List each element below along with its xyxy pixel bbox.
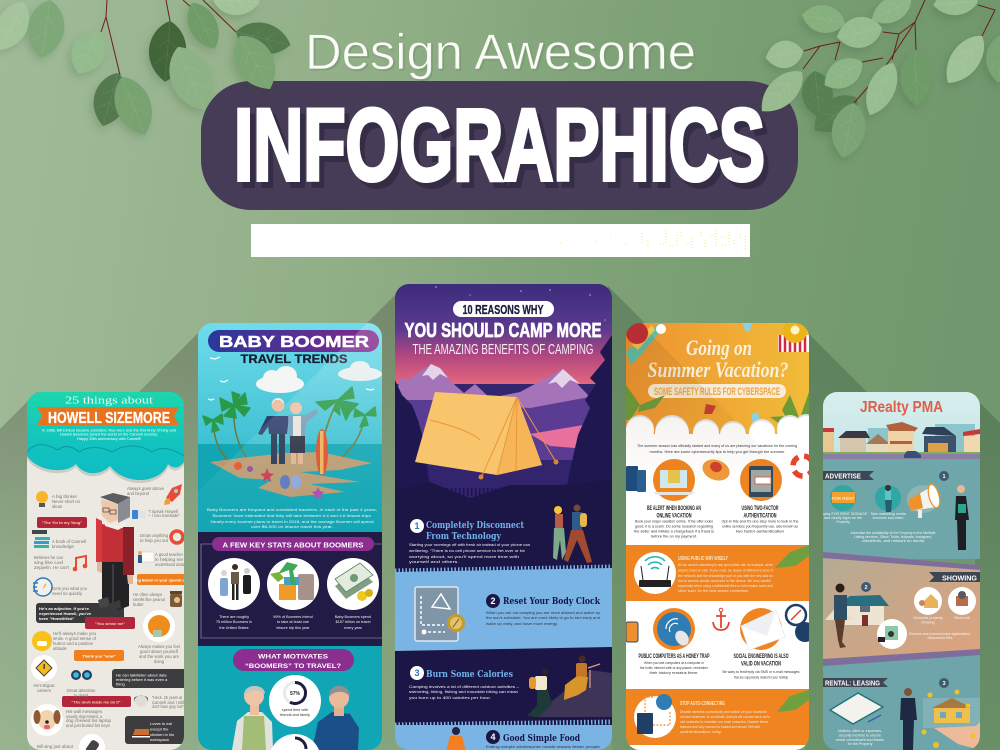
map icon [415,587,465,641]
callout pills: been "Howellified" [39,616,74,621]
title: Design Awesome: Design Awesome [306,26,698,82]
section 1: wellbeing. "There is no cell phone service to fret over or be [409,548,526,553]
hikers couple [553,504,592,563]
rule: public computers [638,608,710,675]
section 4: Eating simple wholesome meals means fewer people [486,744,600,749]
section 3: you burn up to 400 calories per hour. [409,695,491,700]
panel: wifi: Be too careful connecting to any open public wifi, for example, at the [678,562,774,567]
rule 1 [634,459,714,538]
donut 57 percent: spend time with [282,708,308,712]
callout pills: chicken in his [150,732,174,737]
stats heading pill [212,537,374,551]
rule: public computers: the hotel, internet café or any places, remember [640,665,709,670]
donut lower [269,734,321,750]
motivations heading pill: WHAT MOTIVATES [258,654,329,660]
panel: rental leasing: RENTAL: LEASING [825,680,880,688]
town skyline [823,422,980,454]
pill: you sense me: "You sense me" [95,621,125,626]
panel: rental leasing [823,649,981,750]
rule 1: BE ALERT WHEN BOOKING AN [647,506,701,512]
panel: advertise: FOR RENT [832,496,855,501]
tiny caption text: ideas [52,504,62,509]
section 4: Good Simple Food [503,734,581,744]
tiny caption text: Always goes above [127,486,165,491]
tent [415,392,558,480]
panel: rental leasing: rental commitment and leases [836,738,884,742]
tiny caption text: dog chewed his laptop [66,718,112,723]
tiny caption text: Never short on [52,499,81,504]
section 3 [395,647,612,728]
leaves: top left branch [0,0,294,141]
motivations heading pill: “BOOMERS” TO TRAVEL? [245,663,341,670]
heading pill: 10 REASONS WHY [462,302,544,317]
callout pills: experienced Howell, you've [39,611,92,616]
tiny caption text: Bill sing just about [37,744,74,749]
card header with clouds: Happy 25th anniversary with Cannell! [77,437,141,441]
callout pills: except the [150,726,169,732]
panel: advertise: Listing services, Zillow, Trulia, Hotpads, Instagram, [854,535,932,539]
stat captions: every year [344,626,363,630]
section 2: Reset Your Body Clock [503,597,601,607]
tiny caption text: usually dog-related, a [66,714,103,719]
stat captions: 75 million Boomers in [216,620,252,624]
panel: stop auto connecting [626,689,809,745]
tiny caption text: Zeppelin. He can't [34,565,70,570]
card title: JRealty PMA [860,399,943,416]
panel: showing: Show unit [954,616,970,620]
tiny caption text: "I speak Howell [148,509,178,514]
tiny caption text: doing [154,659,165,664]
sea [198,444,382,534]
tiny caption text: need so quickly [52,591,83,596]
panel: advertise: brochure and video [873,516,903,520]
intro paragraph [207,507,377,529]
older woman [232,686,273,750]
beach decorations [626,319,809,365]
woman cooking [446,727,466,750]
rule: social engineering: that are supposedly related to your holiday [734,674,788,680]
intro text [637,443,797,454]
panel: advertise: ADVERTISE [825,474,861,480]
card: Howell Sizemore [27,392,192,750]
section 3: swimming, hiking, fishing and mountain biking can mean [409,689,518,694]
panel: advertise: 1 [942,474,946,480]
section 3: 3 [414,668,420,678]
section 2: the sun's schedule. You are more likely to go to bed early and [486,615,600,620]
light overlay [198,323,382,496]
callout pills: He's an adjective. If you're [39,606,90,611]
tiny caption text: careers [37,688,51,693]
panel: stop auto connecting: cell networks to maintain our hotel networks. Disable these [680,719,769,724]
heading script [648,335,788,382]
section 1: From Technology [426,532,502,542]
section 1: Completely Disconnect [426,521,525,531]
tiny caption text: good about yourself [140,649,179,654]
tiny caption text: A good teacher [155,552,184,557]
heading script: Summer Vacation? [648,357,788,382]
mountains [395,364,612,500]
panel: stop auto connecting: STOP AUTO-CONNECTING [680,701,725,707]
stat captions: There are roughly [219,615,249,619]
section 1: 1 [414,521,420,531]
card: Baby Boomer Travel Trends [198,323,382,750]
safety rules pill [648,384,786,398]
title: Design Awesome: Design Awesome [305,24,696,80]
stat captions: to take at least one [277,620,309,624]
panel: advertise: Property [836,520,850,524]
callout pills: thing [116,682,125,686]
rule 1: good, it is a scam. Do some research regarding [635,524,713,528]
intro paragraph: 'Boomers' have estimated that they will take between 4.4 and 4.6 leisure trips. [212,513,372,518]
panel: showing [823,552,980,665]
passports, hat and lifebuoy [626,456,813,492]
callout pills: He can talk/listen about data [116,672,167,678]
rule: public computers: their history remains there. [650,670,698,675]
card: Going on Summer Vacation [626,312,817,750]
intro text: The summer season has officially started and many of us are planning our vacations for the coming [637,443,797,448]
tiny caption text: knowledge [52,544,75,549]
older man [312,686,359,750]
stat captions: the United States [219,626,249,630]
card: 10 Reasons Why You Should Camp More [395,284,612,750]
stat captions: $157 billion on travel [336,620,371,624]
rule 2: USING TWO-FACTOR [742,506,779,512]
panel: advertise [819,459,980,559]
panel: wifi: the network and the knowledge part of you with the rest and do [678,573,774,578]
panel: wifi: airport, hotel or café. If you must, be aware of different scams of [678,568,774,572]
sky clouds and birds [208,356,382,401]
tiny caption text: and the work you are [139,654,180,659]
surfboard [316,429,328,475]
section 1: Starting your mornings off with fresh air instead of your phone can [409,542,530,547]
tiny caption text: and beyond [127,491,150,496]
rule: social engineering: VALID ON VACATION [741,662,781,668]
tiny caption text: smells like peanut [133,597,166,602]
motivations heading pill [233,649,354,671]
rule 1: Book your major vacation online. If the offer looks [635,518,713,524]
intro text: months. Here are some cybersecurity tips to help you get through the summer [650,449,785,454]
panel: wifi: other such, for the best secure connection [678,588,748,593]
rule 1: ONLINE VACATION [656,514,692,520]
stat captions: Baby Boomers spend [335,615,371,619]
title banner: INFOGRAPHICS: INFOGRAPHICS [234,88,765,202]
donut 57 percent: friends and family [280,713,310,717]
anchor [713,608,729,630]
tiny caption text: to help you out [140,538,169,543]
tiny caption text: A big thinker [52,494,78,499]
stat captions: leisure trip this year [277,626,310,630]
rule: social engineering: Be wary to text/reply via SMS or e-mail messages [722,669,800,674]
tiny caption text: He often always [133,592,162,597]
pill: you sense me [85,617,135,629]
palm trees [203,387,376,462]
section 2 [395,567,612,652]
tiny caption text: attitude [53,646,67,651]
rule 1: the seller and initiate a chargeback if a fraud is [634,528,714,534]
rule 2: AUTHENTICATION [744,514,776,520]
leaves: top right branch [752,0,1000,161]
main heading: YOU SHOULD CAMP MORE [404,320,602,342]
panel: showing: Receive and process lease applications, [909,632,971,636]
intro paragraph: over $6,000 on leisure travel this year. [251,524,333,529]
section 4: 4 [490,732,496,742]
tiny caption text: His wall messages [66,709,102,714]
intro paragraph: Baby Boomers are frequent and consistent travelers. In each of the past 4 years, [207,507,377,512]
panel: wifi [626,545,809,601]
panel: advertise: classifieds, and network on media [862,539,924,543]
rule 2: online services you frequently use, also known as [722,524,798,528]
panel: advertise: Advertise the availability of the Property in the Multiple [850,531,936,535]
tiny caption text: humor and a positive [53,641,94,646]
stars [435,286,606,320]
tiny caption text: understand data [155,562,185,567]
long shadows behind the cards [0,286,1000,750]
island [210,452,372,497]
panel: wifi: not to access certain accounts in the device. Be very careful [678,578,771,583]
panel: key stats [198,532,382,646]
tiny caption text: Gets you what you [52,586,88,591]
hill and hikers [527,656,612,717]
section 2: 2 [490,596,496,606]
panel: showing: 2 [864,585,868,591]
panel: wifi: especially when using confidential files or information such and [678,583,773,588]
tiny caption text: Always makes you feel [138,644,180,649]
rule: social engineering [722,608,800,680]
stat captions: 99% of Boomers intend [273,615,313,619]
tiny caption text: in helping me [155,557,184,562]
tiny caption text: Drops anything [140,533,169,538]
donut 57 percent: 57% [290,691,301,697]
rule 2: two factor authentication [736,528,784,534]
palm leaves [626,385,809,425]
title banner: INFOGRAPHICS [201,81,798,210]
intro paragraph: Nearly every boomer plans to travel in 2018, and the average Boomer will spend [210,519,374,524]
icons [31,484,183,750]
dark pine trees [395,335,612,495]
tiny caption text: don't have gray hair" [152,704,184,709]
tiny caption text: and just buried his keys [66,723,110,728]
card header with clouds: Howell Sizemore joined the world on the Cannell Journey. [60,432,158,436]
tiny caption text: to detail [74,693,88,698]
subtitle: TRAVEL TRENDS [240,354,348,366]
tiny caption text: sing like Led [34,560,64,565]
heading script: Going on [686,335,752,360]
callout pills [36,517,192,744]
title pill: BABY BOOMER [219,334,370,351]
stat circle: people [208,558,260,610]
panel: stop auto connecting: Disable wireless connectivity and switch off your bluetooth [680,709,767,714]
panel: rental leasing: security monthly to ensure [839,734,881,738]
rule 2 [722,459,798,534]
callout pills: workspace [150,737,170,742]
stat circle: travel [267,558,319,610]
tiny caption text: – I can translate" [148,513,181,518]
rule: public computers: When you use computers at a computer in [644,660,704,665]
card header with clouds: HOWELL SIZEMORE [48,410,170,427]
grass horizon [395,480,612,505]
section 2: wake up early, and have more energy. [486,621,558,626]
panel: rental leasing: for the Property [848,742,873,746]
callout pills: Loves to eat [150,721,173,726]
beach items [234,462,324,499]
callout pills: entering before it was even a [116,677,168,682]
callout pills: "Long Banell or your special chat" [130,578,192,582]
diagonal shade [626,312,800,487]
tiny caption text: He'll always make you [53,631,97,636]
panel: advertise: Take marketing media [870,512,906,516]
section 1: yourself and others. [409,559,459,564]
panel: showing: showing [921,620,935,624]
isometric man figure [96,493,134,611]
panel: showing: documents files [928,636,953,640]
card: JRealty PMA [819,392,981,750]
heading pill [453,301,554,317]
card header with clouds [27,392,184,483]
panel: advertise: Display FOR RENT SIGNAGE [819,512,868,516]
panel: motivations [198,646,382,750]
white subtitle bar [251,224,750,257]
panel: wifi: USING PUBLIC WIFI WISELY [678,556,728,562]
stats heading pill: A FEW KEY STATS ABOUT BOOMERS [222,540,364,550]
tiny caption text: "Heck, 25 years at [152,695,183,700]
tiny caption text: Cannell and I still [152,700,184,705]
tiny caption text: Great attention [66,688,96,693]
panel: stop auto connecting: authentication only. [680,729,722,734]
callout pills: "The devil made me do it" [71,700,121,704]
card header with clouds: In 1988, Bill Dinkus became president, Roe Herz was the first Andy Christy and [42,428,176,432]
section 1: worrying about, so you'll spend more time with [409,554,519,559]
tiny caption text: butter [133,602,144,607]
card header with clouds: 25 things about [65,394,153,406]
section 3: Burn Some Calories [426,670,513,680]
panel: showing: SHOWING [942,576,978,582]
rule: public computers: PUBLIC COMPUTERS AS A HONEY TRAP [638,654,710,660]
panel: advertise: and clearly signs on the [824,516,862,520]
panel: stop auto connecting: connect whenever. In our travels, devices will connect back out to [680,714,771,719]
tiny caption text: A book of Cannell [52,539,86,544]
title pill [208,330,379,352]
callout pills: "The Yin to my Yang" [42,520,82,525]
stat captions [216,615,371,630]
tiny caption text: Believes he can [34,555,64,560]
panel: stop auto connecting: features and only connect to trusted and secure Wifi with [680,724,760,729]
title banner: INFOGRAPHICS: INFOGRAPHICS [239,94,770,208]
compass and suitcase [626,605,815,642]
safety rules pill: SOME SAFETY RULES FOR CYBERSPACE [654,386,780,398]
rule 1: before the on my payment. [651,534,697,538]
tiny caption text [33,486,185,749]
tiny caption text: He's Bigcat [33,683,55,688]
callout pills: Thank you "wow" [82,654,116,658]
section 3: Camping involves a lot of different outdoor activities – [409,684,520,689]
sub heading: THE AMAZING BENEFITS OF CAMPING [412,341,594,358]
donut 57 percent [269,675,321,727]
section 2: When you are out camping you are more attuned and active by [486,610,600,615]
section 1 [395,504,612,575]
panel: rental leasing: 3 [942,681,946,687]
tiny caption text: smile. A good sense of [53,636,97,641]
rule: social engineering: SOCIAL ENGINEERING IS ALSO [734,654,789,660]
panel: showing: Schedule property [913,616,943,620]
stat circle: money [327,558,379,610]
rule 2: Opt-in this and it's one step more to look in the [722,518,798,524]
section 4 [395,722,612,750]
road with car [823,451,980,459]
clouds [626,414,817,451]
boomer couple [258,398,318,464]
panel: rental leasing: Notices, client or expenses, [838,729,882,733]
